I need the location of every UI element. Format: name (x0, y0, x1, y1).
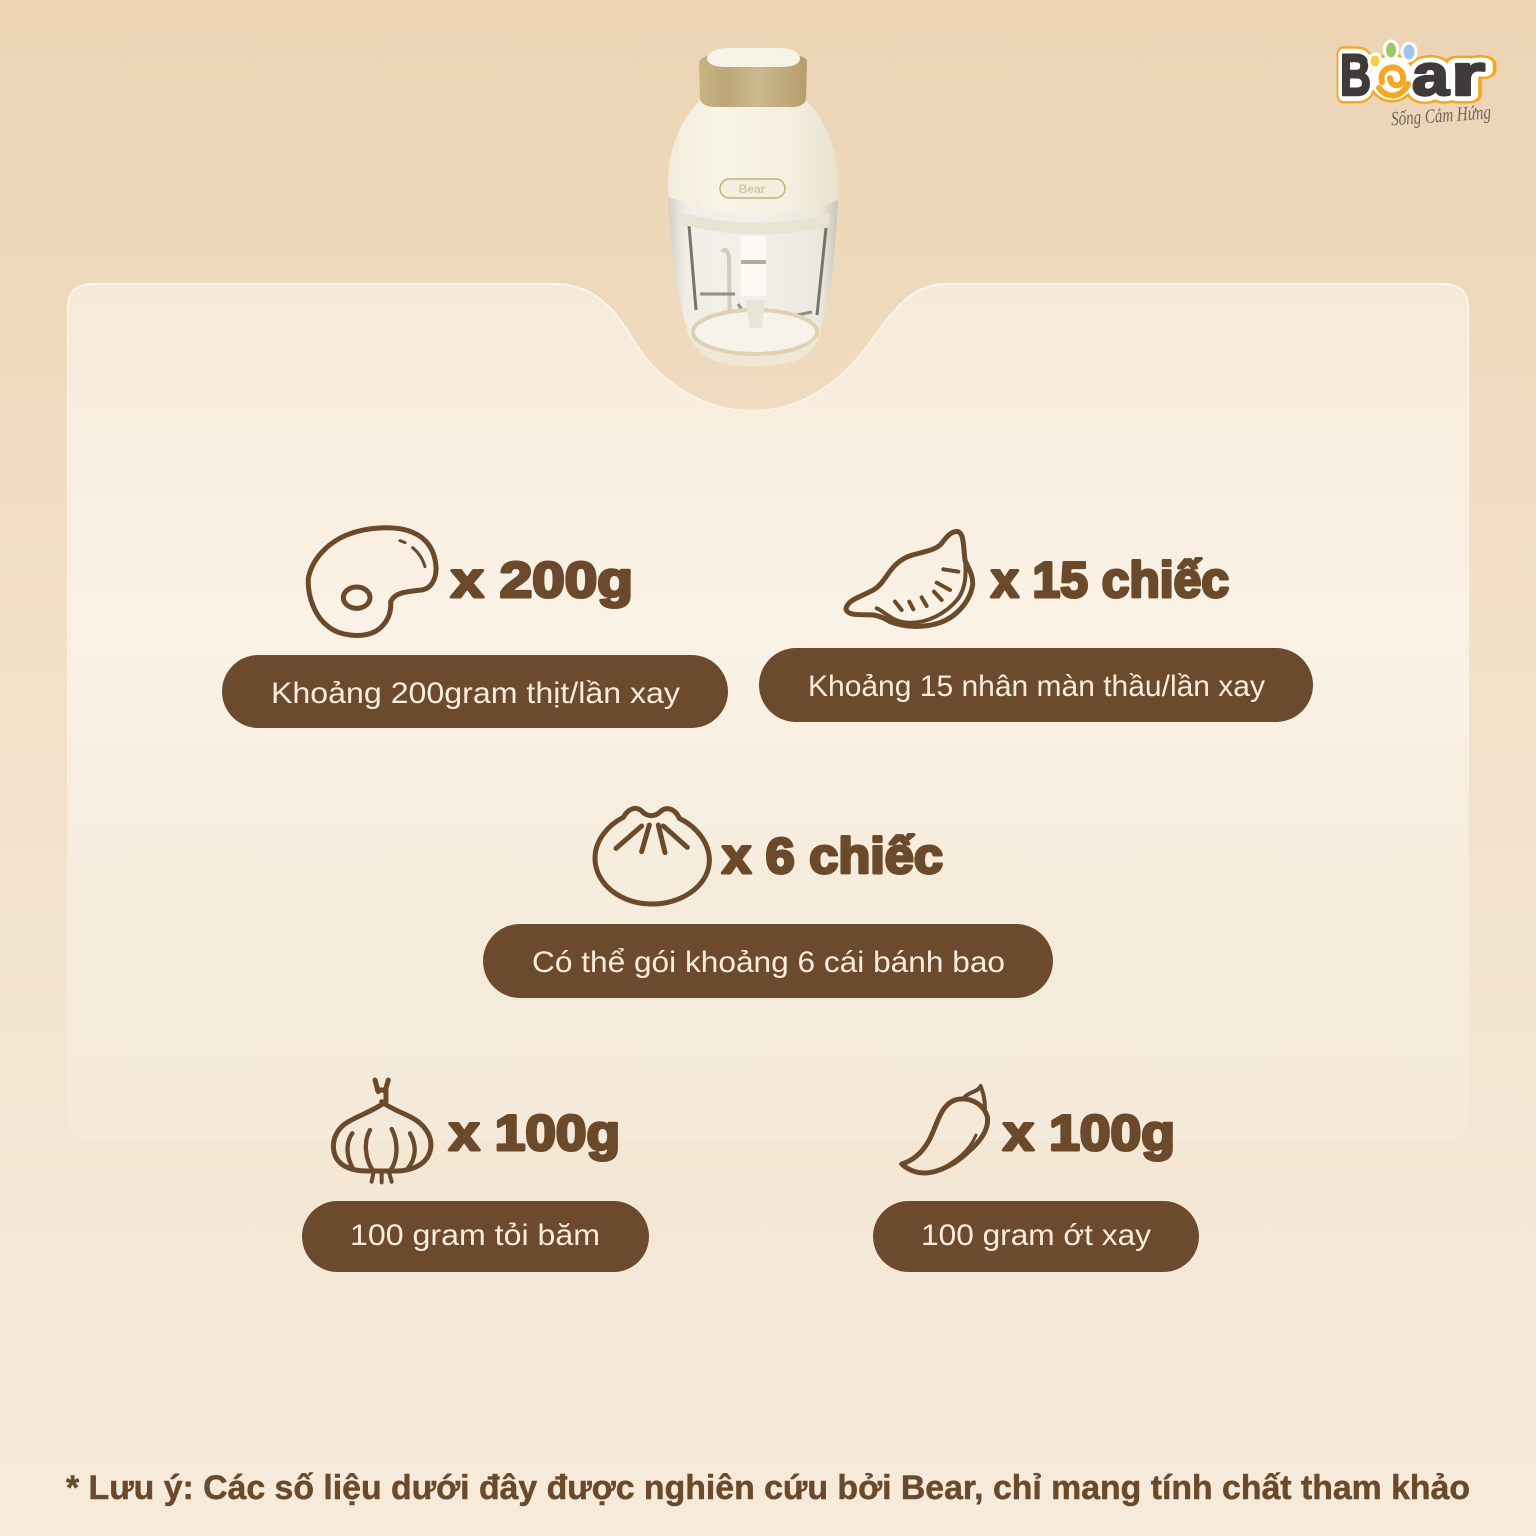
main body (668, 100, 838, 215)
lid top (707, 48, 800, 67)
logo (1340, 41, 1492, 130)
pill text: Khoảng 15 nhân màn thầu/lần xay (808, 670, 1265, 703)
icon: bun (595, 808, 709, 904)
pill (759, 648, 1313, 722)
logo white fill: B (1340, 43, 1371, 108)
footnote: * Lưu ý: Các số liệu dưới đây được nghiên cứu bởi Bear, chỉ mang tính chất tham khảo (66, 1469, 1470, 1507)
logo letters: B (1340, 43, 1371, 108)
logo paw green (1384, 41, 1398, 59)
jar inner details (678, 212, 830, 354)
amount: x 100g (1003, 1105, 1175, 1161)
icon: chili (902, 1086, 988, 1173)
pill text: Có thể gói khoảng 6 cái bánh bao (532, 946, 1005, 979)
pill text: 100 gram ớt xay (921, 1219, 1151, 1252)
gold collar (699, 56, 807, 107)
item: garlic (302, 1080, 649, 1272)
pill text: 100 gram tỏi băm (350, 1219, 600, 1252)
panel with notch (68, 284, 1468, 1140)
logo paw yellow (1369, 54, 1381, 68)
icon: meat (308, 528, 436, 635)
amount: x 6 chiếc (722, 828, 943, 884)
item: steamed bun (483, 808, 1053, 998)
logo paw blue (1402, 43, 1416, 61)
badge text: Bear (739, 182, 766, 196)
pill (302, 1201, 649, 1272)
logo e swirl (1379, 67, 1408, 96)
logo white fill: r (1451, 43, 1485, 108)
amount: x 15 chiếc (991, 552, 1229, 608)
item: chili (873, 1086, 1199, 1272)
item: meat (222, 528, 728, 728)
logo outline (1340, 43, 1485, 108)
amount: x 100g (449, 1105, 620, 1161)
logo white fill: a (1412, 43, 1450, 108)
logo white fill (1340, 43, 1485, 108)
logo letters: a (1412, 43, 1450, 108)
pill (222, 655, 728, 728)
logo outline: a (1412, 43, 1450, 108)
logo slogan: Sống Cảm Hứng (1390, 101, 1492, 130)
logo letters (1340, 43, 1485, 108)
pill (873, 1201, 1199, 1272)
base (688, 334, 820, 366)
pill (483, 924, 1053, 998)
amount: x 200g (451, 552, 633, 608)
logo outline: B (1340, 43, 1371, 108)
badge (720, 179, 785, 198)
item: dumpling (759, 532, 1313, 722)
logo outline: r (1451, 43, 1485, 108)
icon: garlic (333, 1080, 431, 1182)
product: chopper (668, 48, 838, 366)
logo letters: r (1451, 43, 1485, 108)
jar glass (668, 197, 838, 362)
pill text: Khoảng 200gram thịt/lần xay (271, 677, 680, 710)
icon: dumpling (846, 532, 973, 626)
